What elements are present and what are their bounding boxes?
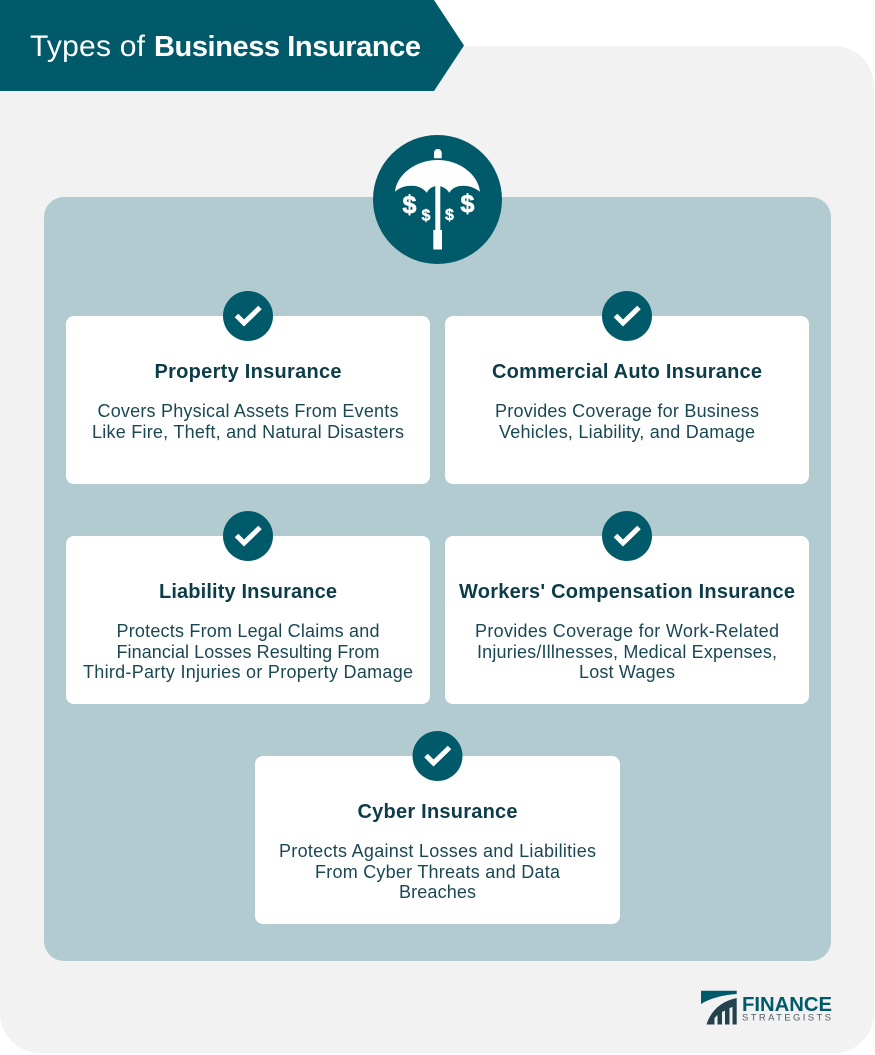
icon: umbrella with dollar signs: $ — [422, 208, 431, 224]
description — [83, 621, 413, 682]
panel: property insurance — [66, 291, 430, 484]
description: Vehicles, Liability, and Damage — [499, 422, 755, 442]
panel: commercial auto insurance — [445, 291, 809, 484]
description: Financial Losses Resulting From — [116, 642, 380, 662]
icon: umbrella with dollar signs: $ — [403, 191, 417, 219]
description: Covers Physical Assets From Events — [98, 401, 398, 421]
panel: liability insurance — [66, 511, 430, 704]
logo: Finance Strategists — [701, 991, 832, 1024]
description — [495, 401, 759, 442]
title: Types of — [30, 30, 146, 63]
description — [92, 401, 404, 442]
icon: umbrella with dollar signs: $ — [445, 207, 454, 224]
icon: check badge — [602, 291, 652, 341]
description: Provides Coverage for Business — [495, 401, 759, 421]
description: From Cyber Threats and Data — [315, 862, 561, 882]
heading: Property Insurance — [154, 361, 342, 383]
title: Business Insurance — [154, 31, 421, 63]
logo tagline: STRATEGISTS — [742, 1012, 831, 1024]
panel: cyber insurance — [255, 731, 620, 924]
description: Breaches — [399, 882, 476, 902]
description: Provides Coverage for Work-Related — [475, 621, 779, 641]
description — [475, 621, 779, 682]
description: Third-Party Injuries or Property Damage — [83, 662, 413, 682]
panel: workers' compensation insurance — [445, 511, 809, 704]
heading: Workers' Compensation Insurance — [459, 581, 795, 603]
heading: Liability Insurance — [159, 581, 337, 603]
logo wordmark: FINANCE — [742, 994, 832, 1016]
heading: Commercial Auto Insurance — [492, 361, 762, 383]
description: Protects Against Losses and Liabilities — [279, 841, 596, 861]
description: Injuries/Illnesses, Medical Expenses, — [477, 642, 777, 662]
icon: check badge — [602, 511, 652, 561]
description: Lost Wages — [579, 662, 675, 682]
main content panel — [44, 197, 831, 961]
icon: check badge — [412, 731, 462, 781]
icon: umbrella with dollar signs: $ — [461, 190, 475, 218]
description: Protects From Legal Claims and — [116, 621, 380, 641]
heading: Cyber Insurance — [358, 801, 518, 823]
banner arrow shape — [0, 0, 464, 91]
description: Like Fire, Theft, and Natural Disasters — [92, 422, 404, 442]
icon: check badge — [223, 291, 273, 341]
icon: umbrella with dollar signs — [373, 135, 502, 264]
icon: check badge — [223, 511, 273, 561]
description — [279, 841, 596, 902]
title banner — [0, 0, 464, 91]
logo mark — [701, 991, 737, 1024]
